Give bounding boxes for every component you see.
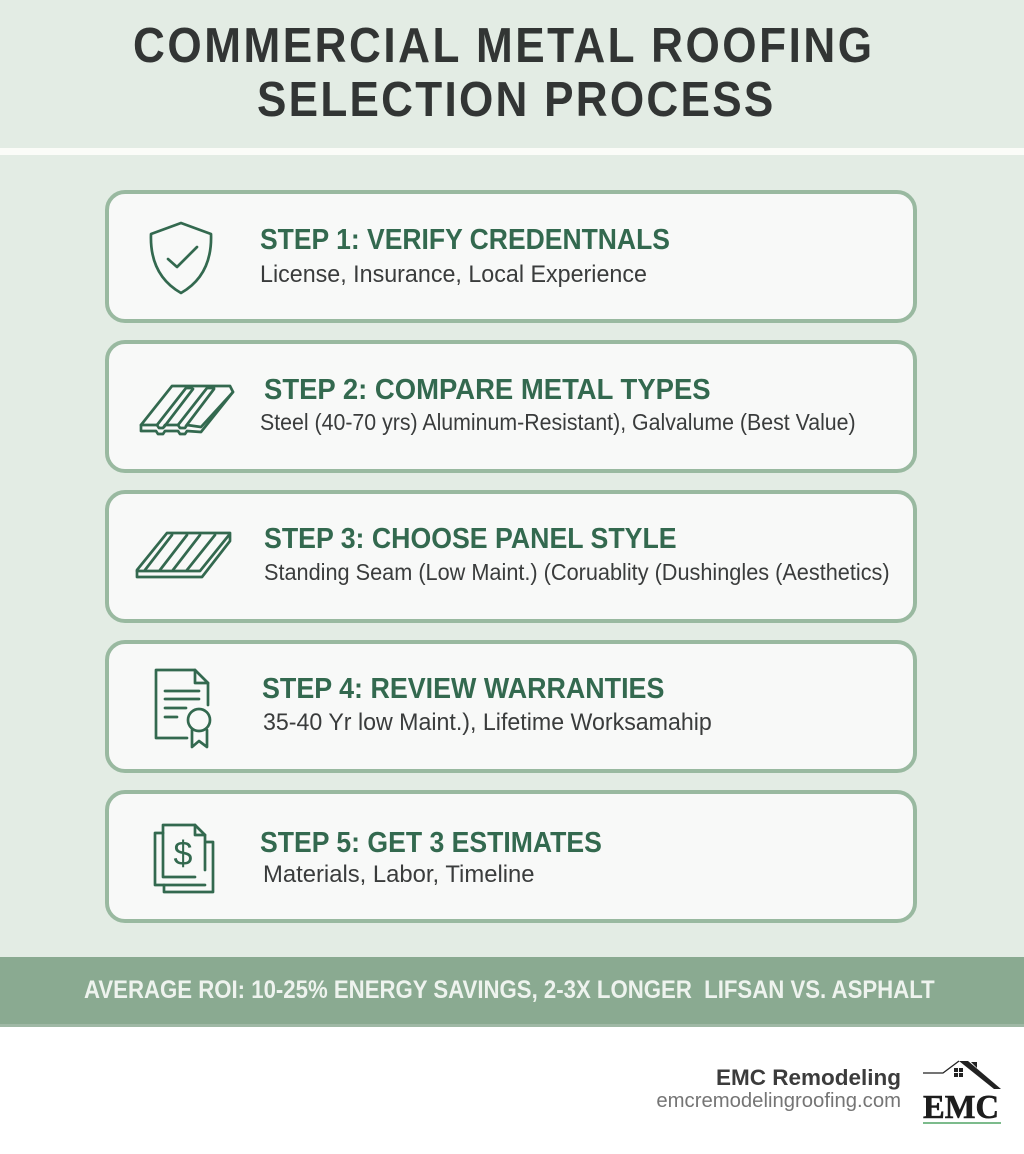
panel: step 1 (105, 190, 917, 323)
step 5 heading: STEP 5: GET 3 ESTIMATES (260, 827, 602, 859)
title line 2: SELECTION PROCESS (257, 73, 776, 127)
logo: EMC (923, 1060, 1001, 1126)
title line 1: COMMERCIAL METAL ROOFING (133, 19, 875, 73)
icon: estimates documents: $ (174, 835, 193, 873)
icon: shield check (150, 222, 212, 294)
ROI banner (0, 957, 1024, 1027)
icon: corrugated metal panel (140, 384, 234, 436)
panel: step 2 (105, 340, 917, 473)
step 3 heading: STEP 3: CHOOSE PANEL STYLE (264, 523, 677, 555)
logo: EMC: EMC (923, 1089, 999, 1126)
step 1 text: License, Insurance, Local Experience (260, 261, 647, 288)
step 4 heading: STEP 4: REVIEW WARRANTIES (262, 673, 664, 705)
step 3 text: Standing Seam (Low Maint.) (Coruablity (Dushingles (Aesthetics) (264, 559, 890, 585)
icon: warranty document (154, 668, 212, 748)
panel: step 3 (105, 490, 917, 623)
step 5 text: Materials, Labor, Timeline (263, 861, 535, 888)
panel: step 4 (105, 640, 917, 773)
step 4 text: 35-40 Yr low Maint.), Lifetime Worksamahip (263, 709, 712, 736)
step 2 text: Steel (40-70 yrs) Aluminum-Resistant), Galvalume (Best Value) (260, 409, 856, 435)
company name: EMC Remodeling (716, 1065, 901, 1090)
header divider band (0, 148, 1024, 155)
icon: standing seam panel (136, 532, 232, 578)
icon: estimates documents (154, 824, 214, 894)
panel: step 5 (105, 790, 917, 923)
step 2 heading: STEP 2: COMPARE METAL TYPES (264, 374, 711, 406)
company website: emcremodelingroofing.com (656, 1090, 901, 1112)
step 1 heading: STEP 1: VERIFY CREDENTNALS (260, 224, 670, 256)
ROI banner text: AVERAGE ROI: 10-25% ENERGY SAVINGS, 2-3X LONGER LIFSAN VS. ASPHALT (84, 976, 935, 1004)
